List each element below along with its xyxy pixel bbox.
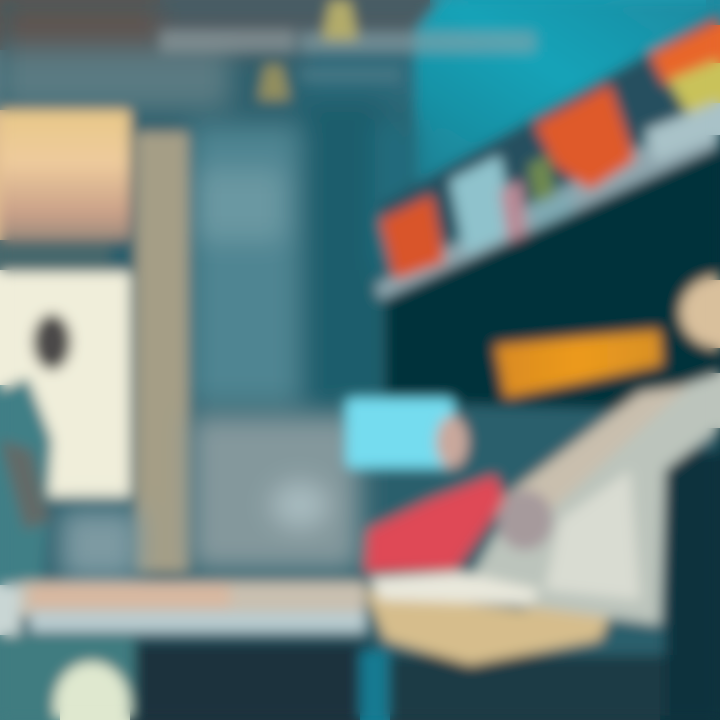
skin blob right	[680, 276, 720, 348]
shoe lace grey	[497, 490, 553, 550]
block: pink accent	[500, 180, 525, 242]
centre teal wall	[190, 100, 415, 410]
cyan screen	[346, 398, 454, 468]
lower centre grey wall	[60, 415, 360, 580]
block: orange top	[650, 20, 720, 85]
shoe sole and base	[365, 590, 620, 665]
banner dark backing	[380, 12, 720, 265]
block: lime yellow	[668, 59, 720, 118]
shoe white sole line	[370, 572, 540, 605]
banner base strip	[375, 106, 720, 300]
ceiling	[0, 0, 450, 110]
bottom right dark floor	[390, 655, 665, 720]
dark shelf area	[385, 135, 720, 430]
block: pale blue	[450, 155, 515, 255]
wooden column	[136, 132, 188, 572]
window: bright glass	[0, 272, 130, 497]
lower right dark panel	[665, 450, 720, 720]
shoe red upper	[365, 475, 505, 572]
banner pale tabs	[530, 190, 575, 230]
faint heading	[160, 30, 535, 82]
orange sign	[495, 330, 662, 398]
shoe pale strap	[500, 385, 690, 520]
shoe bright panel	[545, 470, 640, 600]
window lintel	[0, 240, 110, 268]
person head	[33, 314, 71, 370]
shoe pale bridge	[436, 416, 468, 468]
table top	[0, 582, 365, 635]
block: green accent	[528, 155, 555, 205]
shoe	[365, 373, 720, 665]
person	[0, 314, 71, 590]
shoe white body	[470, 373, 720, 625]
bottom dark floor	[130, 642, 375, 720]
top right teal ceiling	[415, 0, 720, 200]
colourful banner	[375, 12, 720, 300]
window: warm light	[0, 110, 130, 240]
block: orange red	[535, 85, 635, 190]
lamp top	[322, 0, 358, 40]
lamp lower	[258, 65, 290, 100]
block: orange	[380, 195, 445, 280]
person arm	[0, 440, 50, 530]
person body	[0, 378, 52, 590]
floor left reflections	[0, 635, 388, 720]
